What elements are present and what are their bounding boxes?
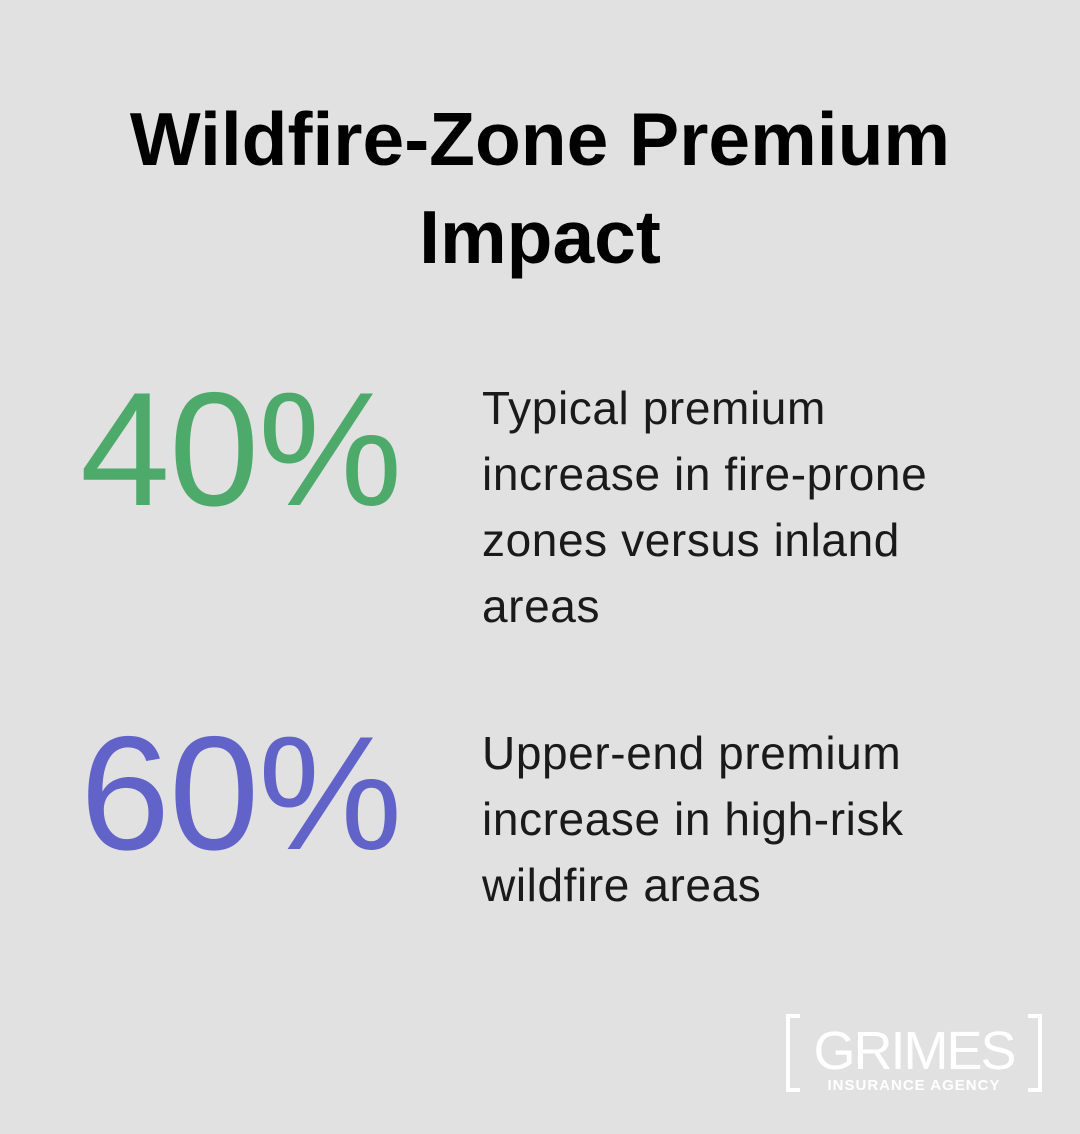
title: Impact [419,195,661,279]
logo: Grimes Insurance Agency: GRIMES [813,1021,1015,1081]
text: 60% description [482,727,904,911]
text: 40% description: areas [482,580,600,632]
logo: Grimes Insurance Agency: INSURANCE AGENCY [828,1077,1000,1094]
title: Wildfire-Zone Premium [130,97,950,181]
text: 40% description [482,382,927,632]
text: 60% description: wildfire areas [482,859,761,911]
text: 40% description: increase in fire-prone [482,448,927,500]
text: 60% description: increase in high-risk [482,793,904,845]
logo: Grimes Insurance Agency [786,1014,1042,1094]
text: 40% description: zones versus inland [482,514,900,566]
text: 40% description: Typical premium [482,382,826,434]
stat: 40%: 40% [80,359,401,540]
stat: 60%: 60% [80,703,401,884]
text: 60% description: Upper-end premium [482,727,901,779]
title [130,97,950,279]
